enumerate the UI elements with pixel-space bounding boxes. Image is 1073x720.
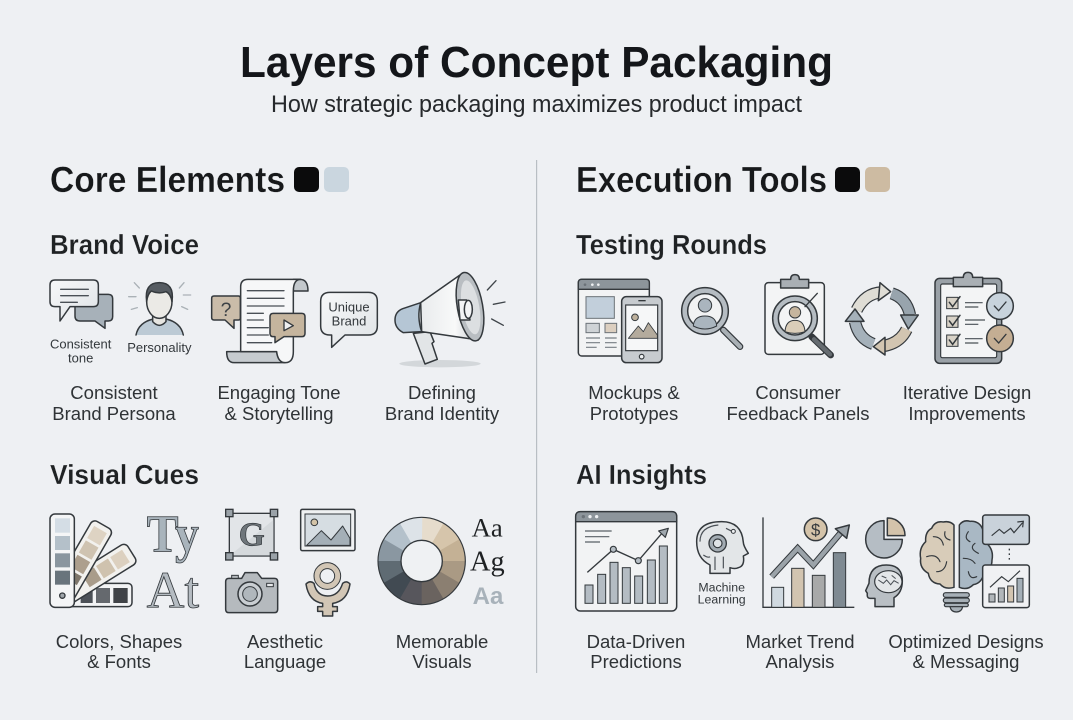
icon: magnifier with person [682,288,740,347]
caption: aesthetic language: Language [244,651,326,672]
caption: data-driven predictions [587,631,685,672]
icon: G selection frame: G [239,517,265,554]
icons: visual cues [50,504,505,619]
font samples [470,513,505,610]
subtitle: How strategic packaging maximizes product impact [271,91,802,118]
caption: defining brand identity: Brand Identity [385,403,500,424]
caption: consistent brand persona: Brand Persona [52,403,176,424]
font samples: Aa [473,583,504,610]
icon: market trend chart: $ [811,520,820,539]
caption: market trend analysis: Analysis [766,651,834,672]
caption: mockups and prototypes: Mockups & [588,382,680,403]
caption: colors shapes fonts [56,631,182,672]
icon: person [129,283,191,335]
icon: machine learning head: Learning [698,593,746,607]
caption: data-driven predictions: Data-Driven [587,631,685,652]
icon: checklist clipboard [935,272,1013,363]
icon: iteration cycle [845,283,918,355]
caption: consistent brand persona: Consistent [70,382,158,403]
caption: iterative design improvements: Improvements [908,403,1026,424]
caption: defining brand identity [385,382,500,424]
caption: aesthetic language [244,631,326,672]
title: Layers of Concept Packaging [240,38,833,87]
icon: mockups and prototypes [578,279,662,363]
icons: ai insights [576,512,1029,612]
icon: aesthetic symbol [306,566,350,616]
font samples: Aa [472,513,503,543]
caption: iterative design improvements [903,382,1031,424]
caption: engaging tone: Engaging Tone [217,382,341,403]
caption: engaging tone: & Storytelling [224,403,334,424]
icon: At type sample: At [147,562,200,619]
caption: memorable visuals: Visuals [412,651,472,672]
caption: defining brand identity: Defining [408,382,476,403]
heading: brand voice: Brand Voice [50,229,199,260]
label: personality: Personality [127,340,192,355]
icon: machine learning head [697,522,748,607]
caption: iterative design improvements: Iterative Design [903,382,1031,403]
caption: memorable visuals: Memorable [396,631,488,652]
caption: memorable visuals [396,631,488,672]
icon: speech bubbles [50,280,113,328]
panel: execution tools [576,159,1044,672]
icon: picture frame [301,509,355,551]
icon: megaphone [395,270,505,367]
icon: market trend chart [763,517,854,607]
caption: consumer feedback panels: Feedback Panels [727,403,869,424]
icon: unique brand bubble: Brand [332,314,366,329]
icon: machine learning head: Machine [698,580,745,594]
icon: clipboard with feedback [765,275,831,355]
caption: market trend analysis: Market Trend [746,631,854,652]
label: consistent tone: Consistent [50,336,112,351]
icon: Ty type sample: Ty [147,504,199,564]
icon: scroll with story bubbles [212,279,308,363]
icons: consistent brand persona [50,270,505,367]
caption: data-driven predictions: Predictions [590,651,682,672]
icon: camera [226,573,278,613]
icon: scroll with story bubbles: ? [221,300,232,321]
caption: consumer feedback panels: Consumer [755,382,841,403]
icons: testing rounds [578,272,1013,363]
caption: optimized designs and messaging: Optimized Designs [888,631,1044,652]
caption: colors shapes fonts: Colors, Shapes [56,631,182,652]
caption: aesthetic language: Aesthetic [247,631,323,652]
heading: visual cues: Visual Cues [50,459,199,490]
colour swatches: core elements [294,167,349,192]
heading: ai insights: AI Insights [576,459,707,490]
caption: optimized designs and messaging [888,631,1044,672]
icon: brain with lightbulb and charts [920,515,1029,612]
icon: data dashboard [576,512,677,611]
caption: mockups and prototypes [588,382,680,424]
colour swatches: execution tools [835,167,890,192]
panel: core elements [50,159,505,672]
caption: mockups and prototypes: Prototypes [590,403,678,424]
font samples: Ag [470,546,505,577]
icon: unique brand bubble [321,292,377,347]
heading: core elements: Core Elements [50,159,285,200]
icon: head with brain [866,565,902,607]
heading: execution tools: Execution Tools [576,159,827,200]
icon: pie chart [866,518,905,558]
caption: engaging tone [217,382,341,424]
caption: consumer feedback panels [727,382,869,424]
icon: swatch fan [50,514,138,607]
heading: testing rounds: Testing Rounds [576,229,767,260]
caption: colors shapes fonts: & Fonts [87,651,151,672]
label: consistent tone [50,336,112,365]
caption: market trend analysis [746,631,854,672]
caption: optimized designs and messaging: & Messaging [913,651,1019,672]
caption: consistent brand persona [52,382,176,424]
icon: colour wheel [378,517,465,605]
icon: G selection frame [226,509,278,560]
label: consistent tone: tone [68,350,93,365]
icon: unique brand bubble: Unique [328,300,370,315]
